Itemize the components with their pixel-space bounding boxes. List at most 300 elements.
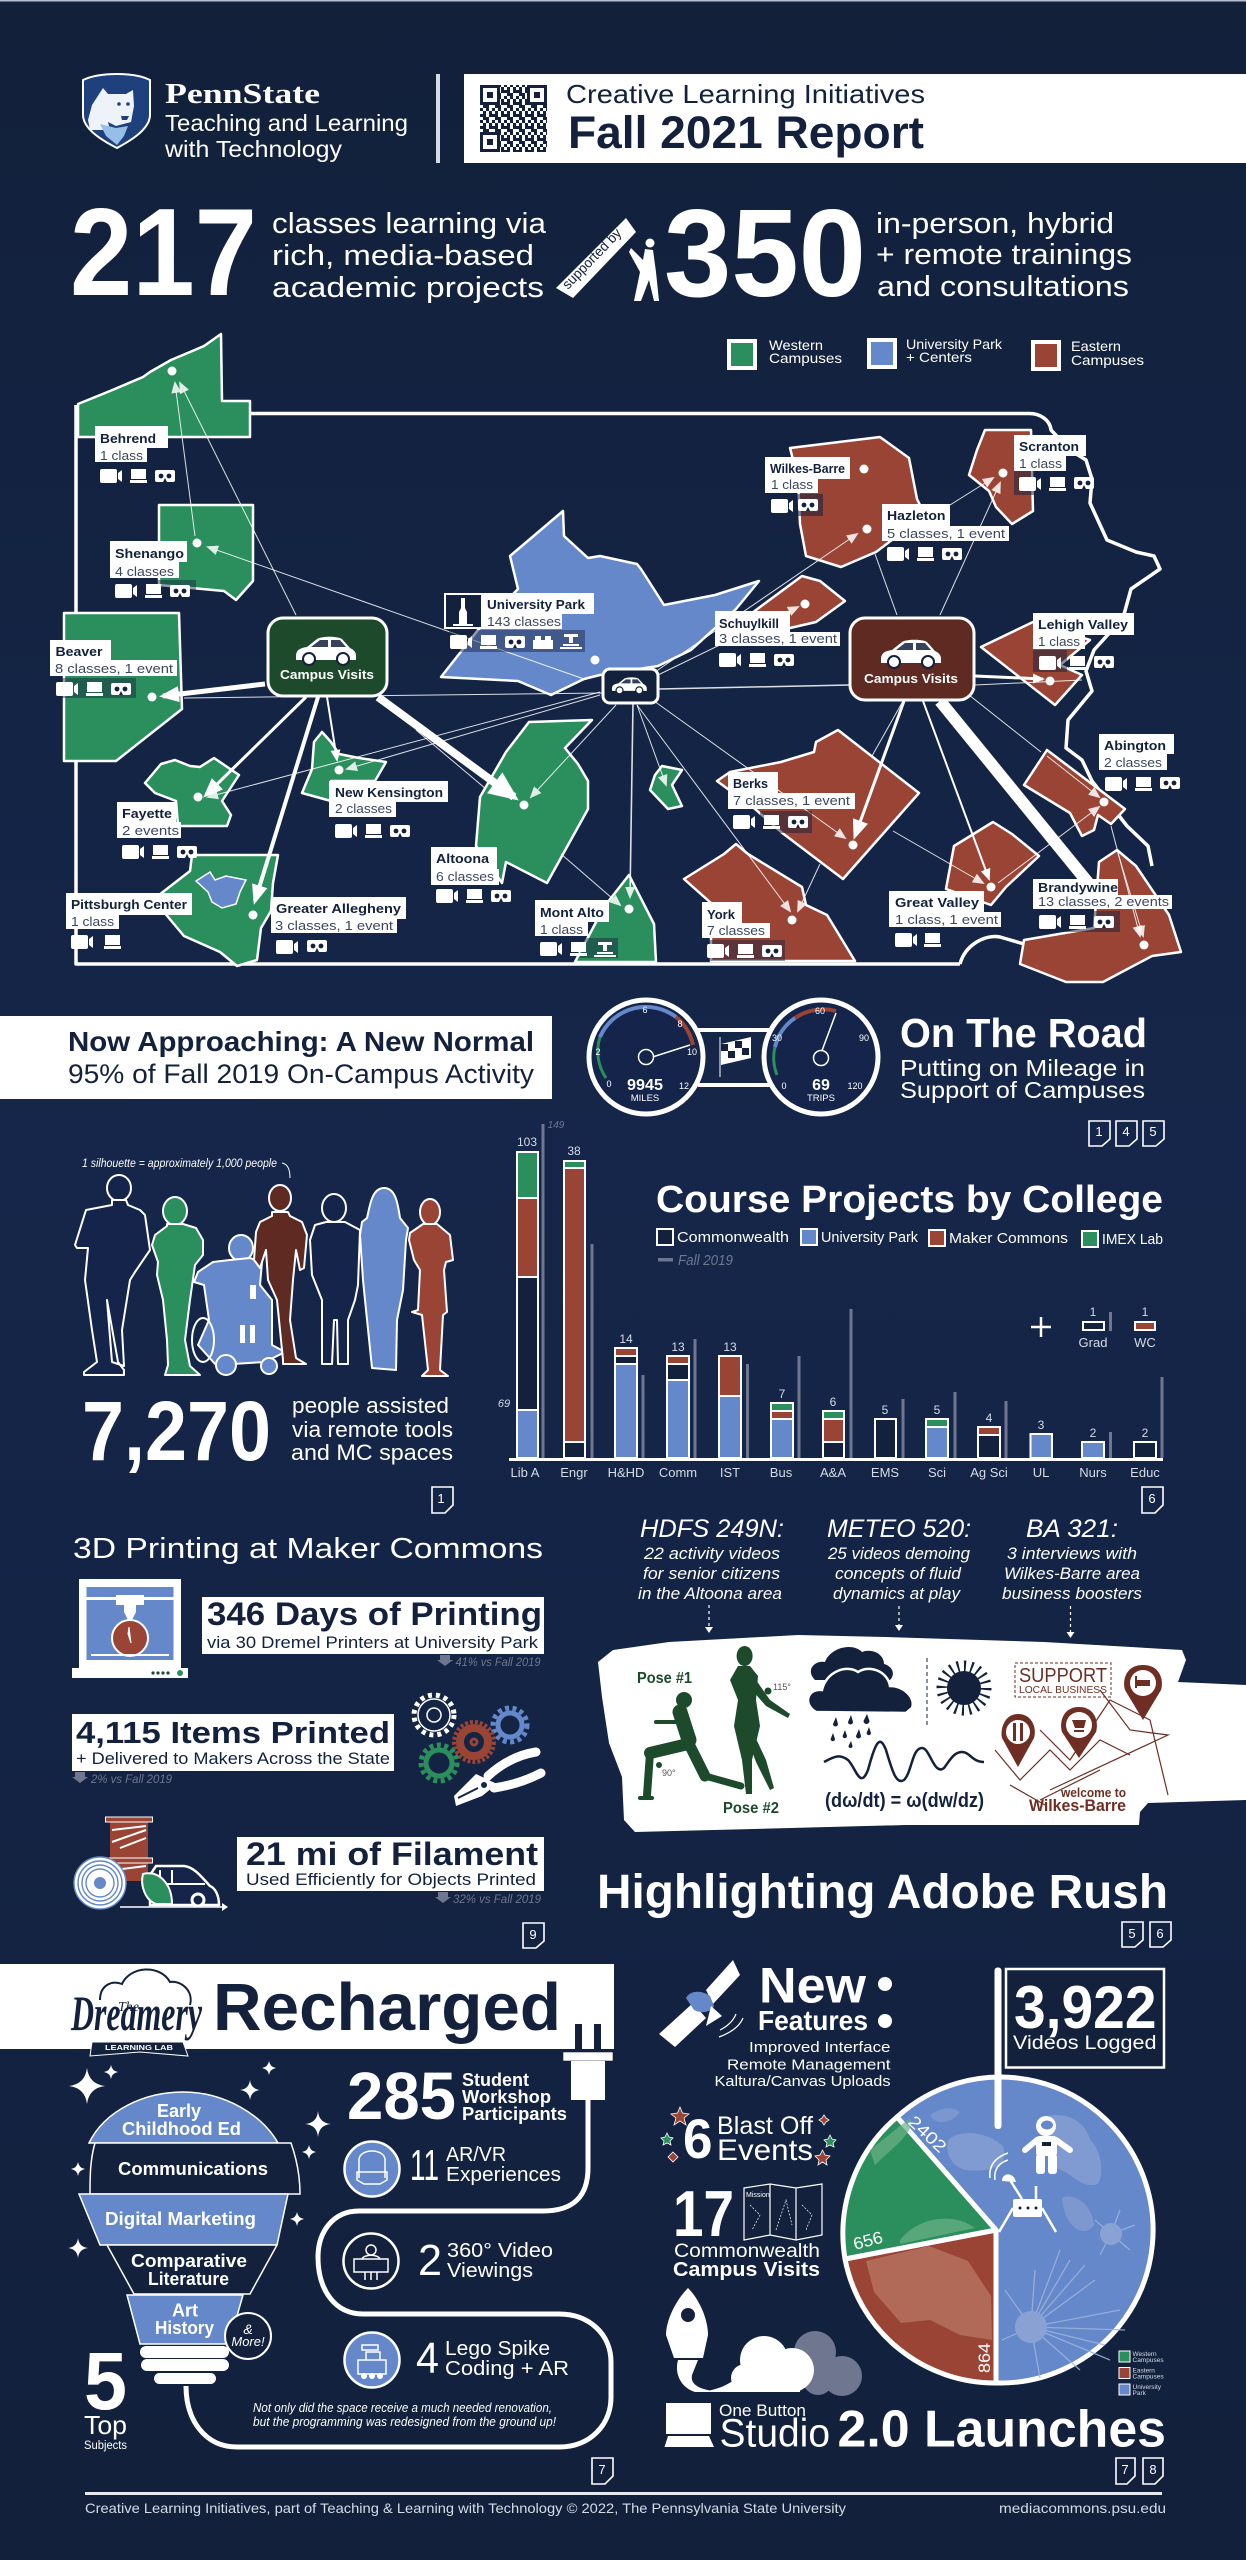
icon: Penn State shield — [83, 74, 150, 148]
callout: 21 mi of Filament — [237, 1836, 544, 1891]
map legend: + Centers — [906, 349, 972, 365]
bars: IST — [719, 1356, 741, 1458]
label: York — [702, 902, 785, 961]
county: University Park — [441, 511, 759, 695]
pie labels: 2402 — [904, 2112, 950, 2157]
text: Pose #2: Pose #2 — [723, 1800, 779, 1817]
label: Great Valley — [889, 891, 1001, 947]
text: welcome to Wilkes-Barre: welcome to — [1060, 1785, 1126, 1800]
label: Berks — [728, 772, 855, 833]
county: Fayette — [145, 758, 239, 826]
stat: 17 Commonwealth Campus Visits: Commonwealth — [674, 2241, 820, 2262]
extras: Grad and WC — [1031, 1305, 1156, 1350]
stat: 6 Blast Off Events: 6 — [683, 2107, 712, 2170]
heading: Recharged: Recharged — [213, 1970, 561, 2045]
stat: 4 Lego Spike: Lego Spike — [445, 2338, 550, 2360]
chart legend: Fall 2019 — [678, 1252, 734, 1269]
logo wordmark: PennState — [165, 79, 320, 110]
stat: 217 classes: classes learning via — [272, 208, 547, 240]
heading: 3D Printing at Maker Commons: 3D Printing at Maker Commons — [73, 1533, 543, 1565]
label: Abington — [1099, 734, 1180, 791]
gauge: miles: 12 — [679, 1081, 689, 1091]
banner: Now Approaching — [0, 1016, 552, 1099]
label: New Kensington: 2 classes — [335, 801, 393, 816]
stat: 2% vs Fall 2019: 2% vs Fall 2019 — [90, 1772, 172, 1786]
value labels: 6 — [830, 1395, 837, 1409]
stat: 11 AR/VR Experiences: AR/VR — [446, 2144, 506, 2166]
stat: 285 Student Workshop Participants: 285 — [347, 2059, 456, 2134]
pie slice: Eastern — [845, 2230, 996, 2383]
reference pages 1 4 5 — [1089, 1121, 1164, 1146]
stat: 2 360 video viewings — [418, 2236, 553, 2285]
label: Schuylkill: Schuylkill — [719, 616, 779, 631]
heading: On The Road: On The Road — [900, 1010, 1147, 1056]
label: Pittsburgh Center: 1 class — [71, 914, 115, 929]
pie legend: Campuses — [1132, 2357, 1164, 2364]
axis labels: EMS — [871, 1465, 899, 1480]
logo wordmark — [164, 79, 408, 162]
county: Brandywine — [1020, 850, 1181, 982]
pointer line — [994, 1968, 1002, 2129]
stat: 7,270 people assisted: people assisted — [292, 1393, 449, 1418]
county: Behrend — [78, 334, 250, 437]
map legend: Eastern — [1071, 338, 1121, 354]
axis labels: H&HD — [608, 1465, 644, 1480]
person red — [409, 1199, 453, 1376]
icon: lunar lander — [990, 2153, 1056, 2232]
label: Altoona: 6 classes — [436, 869, 495, 884]
county: Wilkes-Barre and Hazleton — [790, 437, 925, 567]
state outline — [76, 405, 1160, 964]
reference pages 5 6: 6 — [1156, 1926, 1164, 1941]
chart legend: University Park — [821, 1229, 918, 1246]
icon: mission map: Mission — [746, 2192, 770, 2199]
value labels: 7 — [779, 1387, 786, 1401]
stat: 4 Lego Spike — [416, 2334, 569, 2383]
chart legend: IMEX Lab — [1102, 1231, 1163, 1248]
stat: 217 classes — [70, 184, 547, 322]
stat: 4 Lego Spike: 4 — [416, 2334, 439, 2383]
icon: 3D printer with stopwatch — [72, 1579, 188, 1678]
bulb segment: Art History: Art — [172, 2300, 198, 2320]
icon: pliers — [454, 1752, 541, 1806]
label: Brandywine: Brandywine — [1038, 880, 1118, 895]
label: Schuylkill: 3 classes, 1 event — [719, 631, 837, 646]
pie labels: 656 — [851, 2228, 885, 2254]
county: central green fragment — [650, 766, 682, 809]
moon surface details — [866, 2108, 1135, 2378]
person brown — [254, 1185, 307, 1364]
bars: Comm — [667, 1356, 689, 1458]
gauge: miles: 9945 — [627, 1077, 663, 1094]
person in wheelchair — [192, 1235, 285, 1375]
county: York — [684, 844, 855, 961]
stat: 11 AR/VR Experiences: 11 — [410, 2141, 439, 2190]
banner: Now Approaching: Now Approaching: A New Normal — [68, 1026, 534, 1057]
gauge: miles: 0 — [606, 1079, 612, 1089]
note: silhouette scale: 1 silhouette = approximately 1,000 people — [82, 1156, 277, 1170]
icon: lunging figure — [640, 1692, 741, 1798]
label: University Park — [445, 593, 594, 652]
bars: Sci — [926, 1419, 948, 1458]
stat: 350 trainings: + remote trainings — [876, 239, 1132, 271]
label: Altoona — [431, 847, 511, 903]
county: Scranton — [969, 430, 1033, 524]
text: Pose #1: Pose #1 — [637, 1670, 692, 1687]
value labels: 69 — [498, 1398, 510, 1410]
label: New Kensington — [329, 781, 448, 838]
bulb segment: Communications: Communications — [118, 2159, 268, 2179]
label: Pittsburgh Center: Pittsburgh Center — [71, 897, 187, 912]
stat: 285 Student Workshop Participants: Student — [462, 2070, 529, 2090]
note: renovation — [253, 2401, 556, 2429]
stat: 350 trainings: in-person, hybrid — [876, 208, 1114, 240]
heading: New Features — [758, 1958, 892, 2036]
bars: Bus — [771, 1403, 793, 1458]
label: Wilkes-Barre — [765, 457, 850, 516]
county: Altoona — [476, 720, 592, 883]
bars: Lib A — [517, 1152, 538, 1458]
text: feature list: Improved Interface — [749, 2039, 890, 2056]
label: Mont Alto: Mont Alto — [540, 905, 604, 920]
stat: 6 Blast Off Events: Blast Off — [717, 2112, 813, 2140]
label: Fayette: Fayette — [122, 806, 172, 821]
bars: Engr — [564, 1161, 585, 1458]
value labels: 5 — [882, 1403, 889, 1417]
map: Pennsylvania campuses — [50, 334, 1181, 982]
bars: EMS — [875, 1419, 896, 1458]
label: Behrend: 1 class — [100, 448, 144, 463]
axis labels: Lib A — [511, 1465, 540, 1480]
label: Behrend — [95, 426, 175, 483]
callout: 4,115 Items Printed: 4,115 Items Printed — [76, 1715, 390, 1750]
bars: Ag Sci — [978, 1427, 1000, 1458]
chart legend — [657, 1229, 1163, 1269]
bulb segment: Comparative Literature: Comparative — [131, 2251, 247, 2271]
label: Berks: 7 classes, 1 event — [733, 793, 850, 808]
map legend: Campuses — [1071, 352, 1144, 368]
stat: 6 Blast Off Events: Events — [717, 2134, 813, 2167]
icon: satellite — [659, 1960, 743, 2047]
text: METEO 520: METEO 520: — [827, 1515, 971, 1543]
axis labels: IST — [720, 1465, 740, 1480]
stat: 5 Top Subjects: Subjects — [84, 2440, 127, 2452]
text: METEO 520: 25 videos demoing — [827, 1544, 971, 1563]
bulb segment: Early Childhood Ed — [89, 2092, 278, 2143]
bulb segment: Early Childhood Ed: Childhood Ed — [122, 2119, 241, 2139]
badge: & More: More! — [231, 2334, 265, 2349]
pie legend: Park — [1132, 2390, 1147, 2397]
logo: The Dreamery — [70, 1969, 203, 2056]
reference pages 1 4 5: 4 — [1122, 1124, 1130, 1139]
dashed arrows — [709, 1605, 1070, 1633]
reference page 7: 7 — [598, 2462, 606, 2477]
icon: person holding supported-by sign: supported by — [559, 225, 624, 292]
county: Abington — [1024, 750, 1125, 836]
icon: storm cloud — [808, 1647, 913, 1713]
text: feature list: Kaltura/Canvas Uploads — [714, 2073, 890, 2090]
reference pages 5 6: 5 — [1128, 1926, 1136, 1941]
stat: 285 Student Workshop Participants — [347, 2059, 567, 2134]
extras: Grad and WC: Grad — [1079, 1335, 1107, 1350]
label: Great Valley: Great Valley — [895, 895, 980, 910]
label: Shenango: 4 classes — [115, 564, 175, 579]
stat: 217 classes: 217 — [70, 184, 257, 322]
reference pages 7 8: 8 — [1149, 2462, 1157, 2477]
bar chart: course projects by college — [498, 1120, 1163, 1480]
label: Fayette: 2 events — [122, 823, 180, 838]
callout: 346 Days of Printing: via 30 Dremel Printers at University Park — [207, 1633, 539, 1652]
heading: New Features: New — [759, 1958, 866, 2014]
text: HDFS 249N — [638, 1515, 784, 1603]
bars: A&A — [823, 1411, 844, 1458]
reference page 9: 9 — [529, 1927, 537, 1942]
value labels: 3 — [1038, 1418, 1045, 1432]
value labels: 4 — [986, 1411, 993, 1425]
stat: 217 classes: academic projects — [272, 272, 544, 304]
gauge: trips: 120 — [847, 1081, 863, 1091]
note: silhouette scale — [82, 1156, 290, 1178]
label: Beaver — [50, 640, 177, 698]
text: METEO 520 — [827, 1515, 971, 1603]
label: Greater Allegheny: 3 classes, 1 event — [275, 918, 393, 933]
gauge: trips: 69 — [812, 1077, 830, 1094]
bulb segment: Digital Marketing: Digital Marketing — [105, 2209, 256, 2229]
text: BA 321: Wilkes-Barre area — [1004, 1564, 1140, 1583]
callout: 346 Days of Printing — [202, 1596, 544, 1654]
panel: white brush stroke: 90° — [662, 1768, 676, 1778]
text: feature list: Remote Management — [727, 2056, 891, 2074]
box: Campus Visits east — [850, 618, 974, 700]
bulb base — [140, 2346, 229, 2384]
text: BA 321: BA 321: — [1026, 1515, 1118, 1543]
logo wordmark: with Technology — [164, 136, 343, 162]
reference pages 5 6 — [1122, 1922, 1171, 1947]
label: Lehigh Valley: Lehigh Valley — [1038, 617, 1129, 632]
pie labels — [851, 2112, 994, 2373]
label: Lehigh Valley — [1033, 613, 1134, 672]
stat: 6 Blast Off Events — [661, 2107, 836, 2170]
callout: 346 Days of Printing: 346 Days of Printing — [207, 1596, 542, 1632]
stat: 7,270 people assisted: and MC spaces — [291, 1440, 453, 1465]
callout: 4,115 Items Printed — [72, 1714, 394, 1771]
map legend: Western — [769, 337, 823, 353]
bars: Educ — [1134, 1442, 1156, 1458]
text: METEO 520: concepts of fluid — [835, 1564, 962, 1583]
county: New Kensington — [302, 732, 386, 801]
person green — [152, 1197, 203, 1375]
reference page 1 — [432, 1487, 453, 1513]
extras: Grad and WC: 1 — [1142, 1305, 1149, 1319]
icon: sunburst — [942, 1666, 986, 1710]
stat: 285 Student Workshop Participants: Workshop — [462, 2087, 551, 2107]
label: Pittsburgh Center — [66, 893, 192, 949]
stat: 217 classes: rich, media-based — [272, 240, 534, 272]
label: Scranton: 1 class — [1019, 456, 1063, 471]
badge: & More — [225, 2313, 271, 2359]
header: Penn State logo — [83, 74, 408, 162]
stat: 350 trainings: and consultations — [877, 271, 1129, 303]
heading: New Features: Features — [758, 2005, 868, 2036]
text: welcome to Wilkes-Barre — [1029, 1785, 1126, 1815]
label: Lehigh Valley: 1 class — [1038, 634, 1081, 649]
gauge: trips: 60 — [815, 1006, 825, 1016]
stat: 2 360 video viewings: 360° Video — [447, 2240, 553, 2262]
label: Hazleton: 5 classes, 1 event — [887, 526, 1005, 541]
gauge: trips: 90 — [859, 1033, 869, 1043]
box: Campus Visits west: Campus Visits — [280, 667, 374, 682]
text: HDFS 249N: 22 activity videos — [643, 1544, 781, 1563]
value labels: 2 — [1090, 1426, 1097, 1440]
box: Campus Visits east: Campus Visits — [864, 671, 958, 686]
label: Mont Alto — [535, 900, 618, 958]
label: Scranton — [1014, 435, 1094, 495]
value labels: 14 — [619, 1332, 633, 1346]
chart legend: Maker Commons — [949, 1230, 1068, 1247]
label: Hazleton: Hazleton — [887, 508, 946, 523]
icon: rain drops — [831, 1714, 871, 1748]
icon: power cord and plug — [186, 2024, 613, 2447]
icons: stars — [661, 2107, 836, 2165]
county: Great Valley — [946, 822, 1039, 905]
gauge: miles: 2 — [595, 1047, 601, 1057]
heading: On The Road — [900, 1010, 1147, 1103]
stat: 11 AR/VR Experiences — [410, 2141, 561, 2190]
label: Abington: 2 classes — [1104, 755, 1163, 770]
fall 2019 reference lines — [543, 1124, 1162, 1458]
person outline 2 — [310, 1194, 360, 1364]
icon: computer — [664, 2403, 714, 2447]
gauge: trips: TRIPS — [807, 1093, 835, 1104]
axis labels: Ag Sci — [970, 1465, 1008, 1480]
county: Beaver — [64, 613, 182, 761]
label: Fayette — [117, 802, 197, 859]
axis labels: UL — [1033, 1465, 1049, 1480]
gauge: miles: 6 — [642, 1005, 648, 1015]
extras: Grad and WC: 1 — [1090, 1305, 1097, 1319]
text: formula: (dω/dt) = ω(dw/dz) — [825, 1790, 984, 1812]
reference page 6 — [1142, 1487, 1163, 1513]
box: Campus Visits west — [268, 618, 387, 696]
value labels: 13 — [723, 1340, 737, 1354]
logo: The Dreamery: Dreamery — [70, 1985, 203, 2041]
title banner — [464, 74, 1246, 163]
bulb segment: Digital Marketing — [79, 2194, 288, 2245]
stat: 11 AR/VR Experiences: Experiences — [446, 2164, 561, 2186]
heading: On The Road: Support of Campuses — [900, 1077, 1145, 1103]
axis labels: Sci — [928, 1465, 946, 1480]
stat: 350 trainings: 350 — [664, 185, 866, 323]
heading: On The Road: Putting on Mileage in — [900, 1055, 1145, 1081]
sign: support local business — [1015, 1663, 1111, 1697]
label: Abington: Abington — [1104, 738, 1166, 753]
label: York: York — [707, 907, 736, 922]
axis labels — [511, 1465, 1160, 1480]
reference page 1: 1 — [437, 1491, 445, 1506]
axis labels: Educ — [1130, 1465, 1160, 1480]
county: Shenango — [159, 505, 253, 600]
central car hub — [603, 669, 658, 703]
sign: support local business: LOCAL BUSINESS — [1019, 1685, 1107, 1696]
label: Shenango: Shenango — [115, 546, 184, 561]
value labels: 38 — [567, 1144, 581, 1158]
text: welcome to Wilkes-Barre: Wilkes-Barre — [1029, 1796, 1126, 1815]
text: HDFS 249N: in the Altoona area — [638, 1584, 782, 1603]
heading: One Button Studio 2.0 Launches: Studio — [720, 2412, 830, 2456]
heading: Course Projects by College: Course Projects by College — [656, 1179, 1163, 1221]
icon: checkered flag — [720, 1037, 751, 1077]
bulb segment: Early Childhood Ed: Early — [157, 2101, 201, 2121]
icon: standing figure — [730, 1646, 790, 1794]
stat: 4 Lego Spike: Coding + AR — [445, 2358, 569, 2380]
county: Greater Allegheny — [159, 855, 278, 966]
callout: 3,922 Videos Logged: 3,922 — [1014, 1974, 1156, 2041]
label: Altoona: Altoona — [436, 851, 490, 866]
stat: 350 trainings — [664, 185, 1132, 323]
reference page 9 — [523, 1923, 544, 1948]
value labels: 103 — [517, 1135, 537, 1149]
callout: 3,922 Videos Logged — [1006, 1969, 1164, 2068]
map legend: Campuses — [769, 350, 842, 366]
chart: wave — [824, 1742, 984, 1781]
heading: One Button Studio 2.0 Launches: 2.0 Launches — [838, 2400, 1166, 2458]
county: Lehigh Valley — [981, 622, 1090, 705]
reference pages 7 8 — [1116, 2458, 1163, 2484]
axis labels: A&A — [820, 1465, 846, 1480]
stat: 41% vs Fall 2019: 41% vs Fall 2019 — [456, 1655, 541, 1669]
gauge: miles: MILES — [631, 1093, 659, 1104]
bars: Nurs — [1082, 1442, 1104, 1458]
stat: 17 Commonwealth Campus Visits: Campus Visits — [673, 2259, 820, 2281]
footer credit: Creative Learning Initiatives, part of Teaching & Learning with Technology © 2022, The Pennsylvania State University — [85, 2500, 846, 2516]
icon: mission map — [744, 2184, 822, 2240]
label: Hazleton — [882, 504, 1009, 561]
label: Behrend: Behrend — [100, 431, 156, 446]
icon: gears — [414, 1695, 527, 1781]
text: BA 321: 3 interviews with — [1007, 1544, 1137, 1563]
person outline 1 — [75, 1175, 150, 1375]
logo: The Dreamery: LEARNING LAB — [105, 2043, 174, 2052]
stat: 17 Commonwealth Campus Visits — [673, 2177, 822, 2281]
icon: filament spool and car — [74, 1817, 228, 1911]
stat: 5 Top Subjects: Top — [84, 2410, 127, 2440]
stat: 2 360 video viewings: 2 — [418, 2236, 442, 2285]
axis labels: Comm — [659, 1465, 697, 1480]
callout: 21 mi of Filament: Used Efficiently for Objects Printed — [246, 1870, 536, 1889]
reference page 7 — [592, 2458, 613, 2484]
label: Wilkes-Barre: Wilkes-Barre — [770, 461, 845, 476]
county: Schuylkill — [752, 576, 845, 628]
label: Wilkes-Barre: 1 class — [771, 477, 814, 492]
banner: Now Approaching: 95% of Fall 2019 On-Campus Activity — [68, 1059, 535, 1089]
badge: & More: & — [243, 2321, 253, 2337]
label: Brandywine — [1033, 879, 1172, 932]
bars: UL — [1030, 1434, 1052, 1458]
icon: astronaut — [1025, 2116, 1070, 2174]
label: University Park: 143 classes — [487, 614, 562, 629]
label: York: 7 classes — [707, 923, 766, 938]
stat: 2 360 video viewings: Viewings — [447, 2260, 533, 2282]
value labels: 149 — [548, 1120, 565, 1131]
reference pages 1 4 5: 1 — [1095, 1124, 1103, 1139]
bulb segment: Art History: History — [155, 2318, 214, 2338]
label: Mont Alto: 1 class — [540, 922, 584, 937]
gauge: trips — [764, 1000, 878, 1114]
extras: Grad and WC: WC — [1134, 1335, 1156, 1350]
bars: H&HD — [615, 1348, 637, 1458]
text: BA 321: business boosters — [1002, 1584, 1143, 1603]
axis labels: Bus — [770, 1465, 793, 1480]
